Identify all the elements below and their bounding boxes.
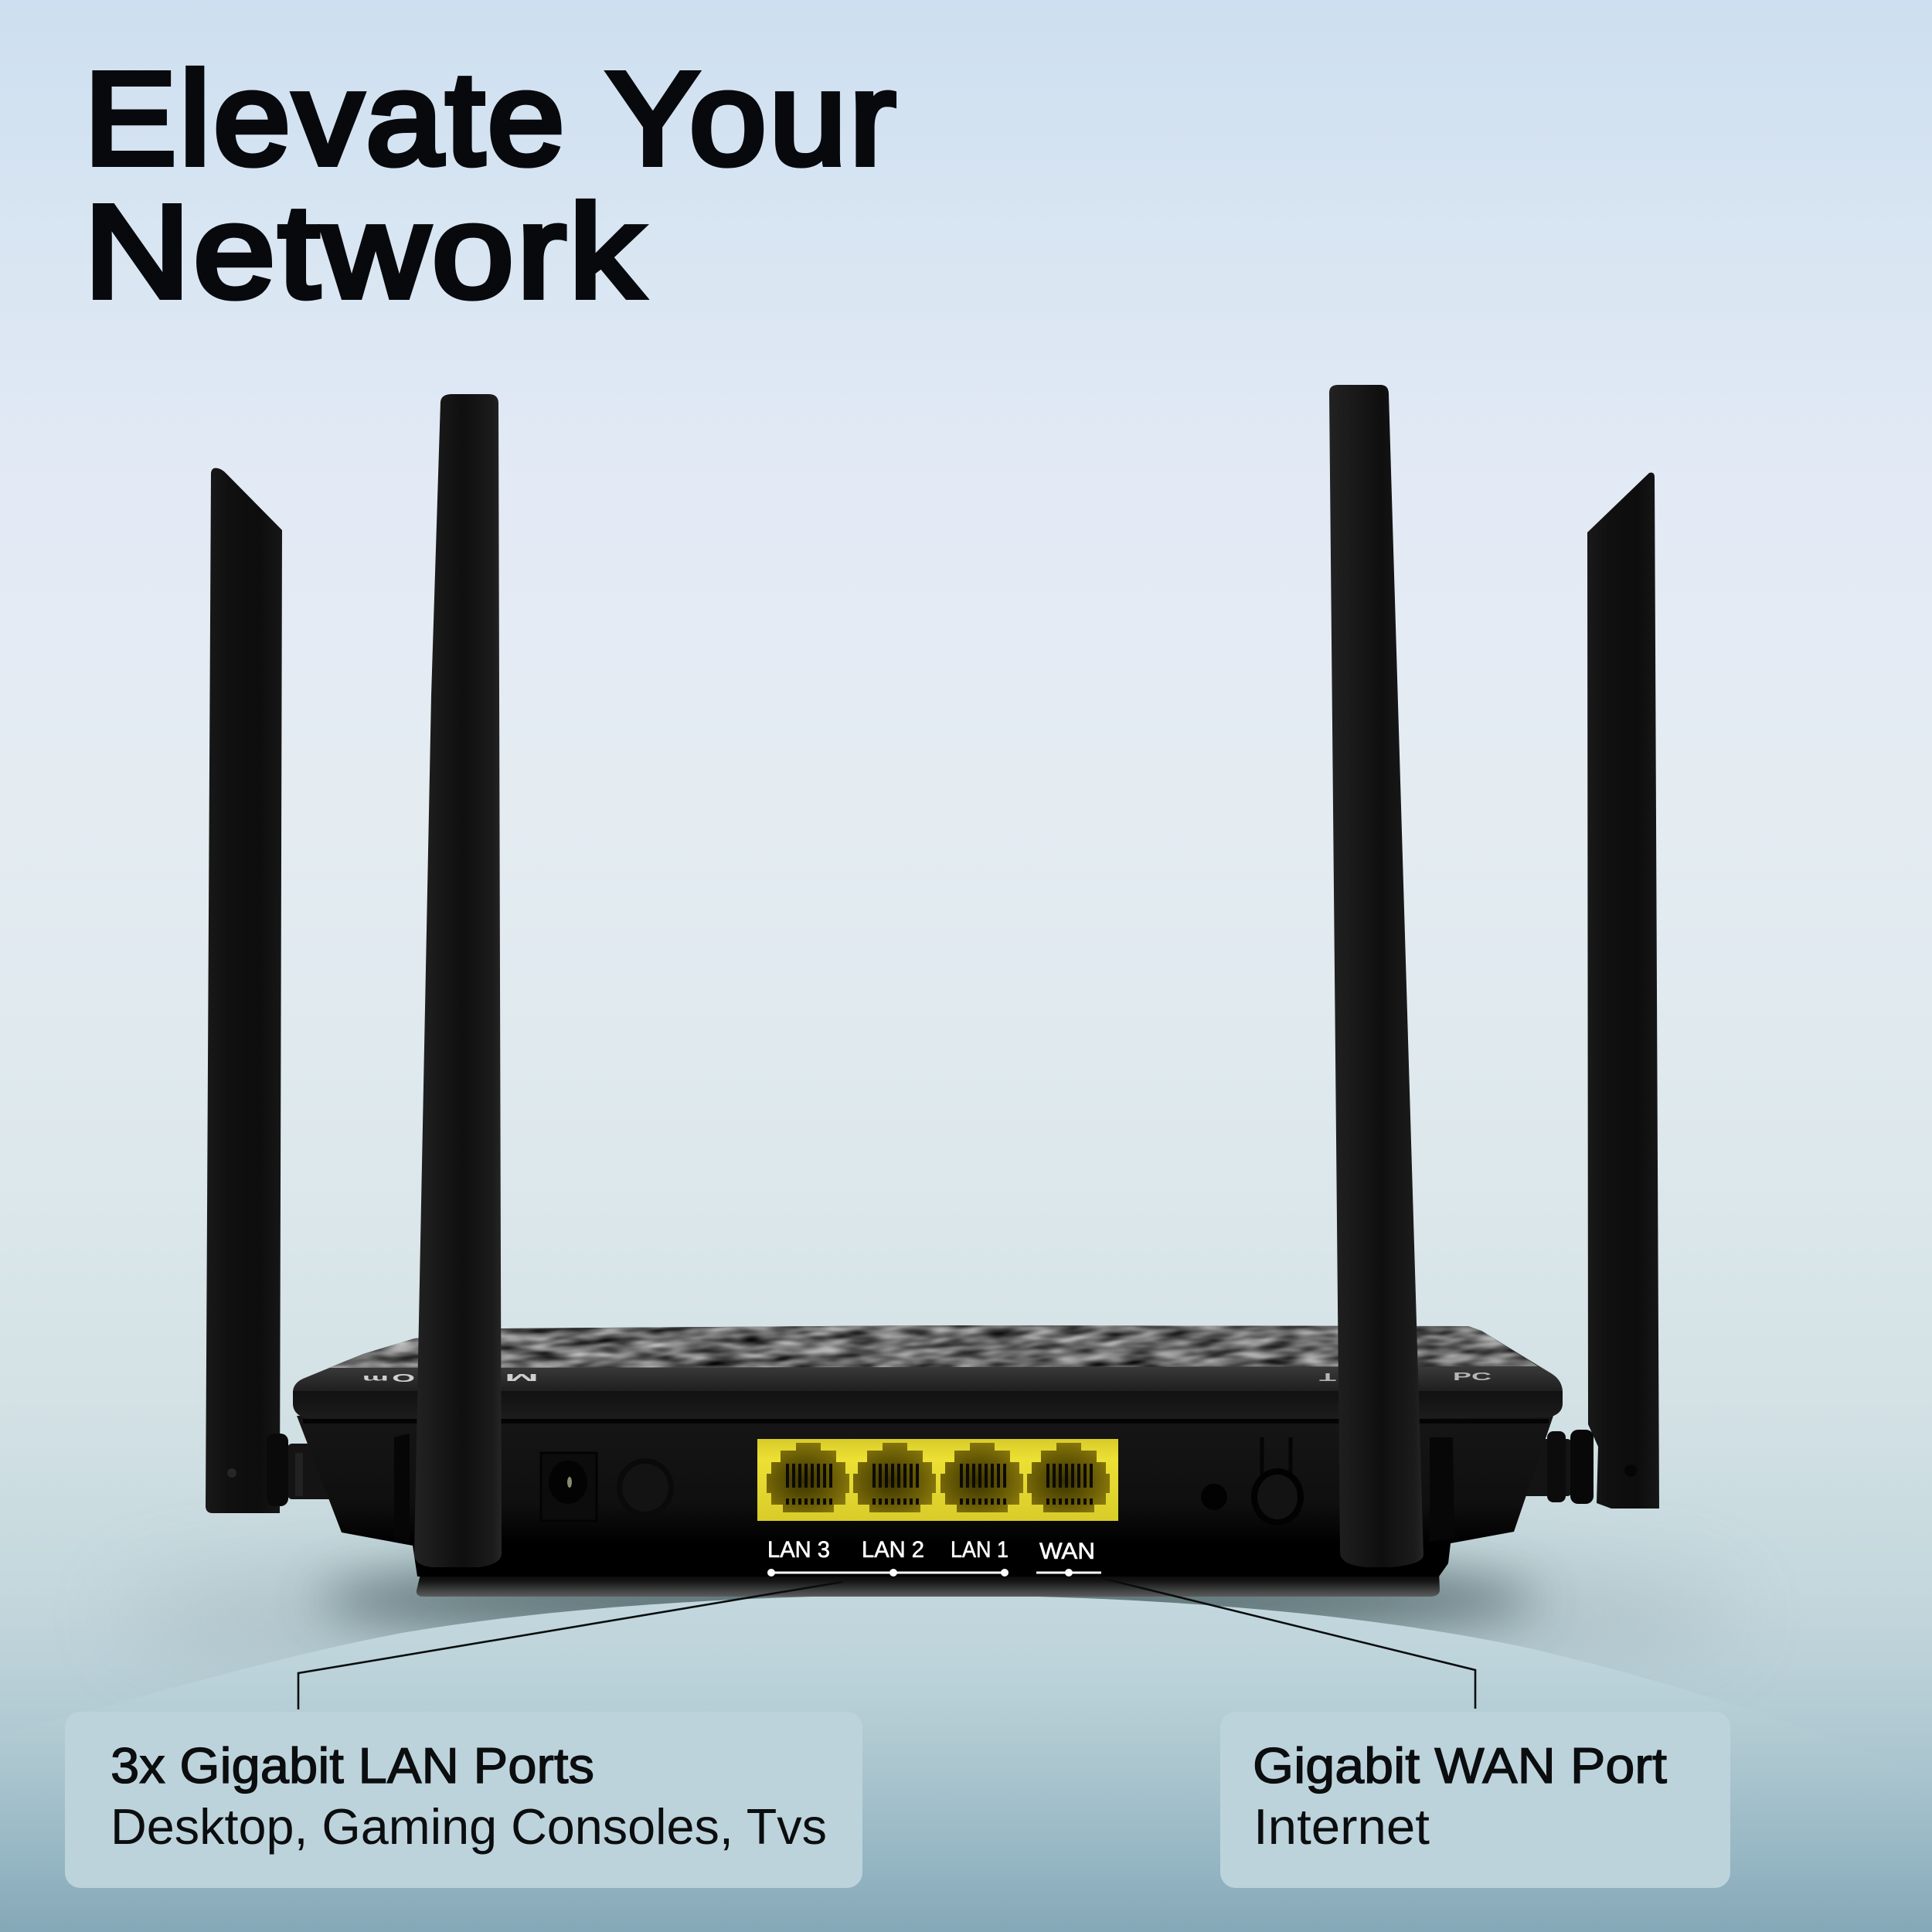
inner-left antenna xyxy=(414,394,502,1567)
yellow port panel xyxy=(757,1439,1118,1521)
reset hole xyxy=(1201,1484,1227,1510)
shadow beneath router xyxy=(317,1560,1538,1640)
lid lettering right: T xyxy=(1319,1371,1336,1383)
lid front edge xyxy=(293,1391,1563,1420)
lid lettering right: PC xyxy=(1453,1370,1492,1383)
far-left antenna xyxy=(206,468,282,1513)
WAN bracket xyxy=(1036,1569,1101,1577)
dimpled vent pattern xyxy=(328,1325,1538,1368)
wide soft shadow beneath router xyxy=(116,1561,1739,1669)
router base plate xyxy=(417,1571,1440,1597)
lid lettering left xyxy=(362,1372,539,1384)
curved floor arc xyxy=(0,1595,1932,1932)
port labels: LAN 2 xyxy=(862,1537,924,1563)
lid lettering left: M xyxy=(505,1372,539,1383)
lid lettering right xyxy=(1319,1370,1492,1383)
body: LAN devices: Desktop, Gaming Consoles, Tvs xyxy=(111,1798,827,1855)
body: WAN use: Internet xyxy=(1253,1798,1430,1855)
title xyxy=(84,46,899,325)
inner-right antenna xyxy=(1329,385,1423,1567)
title: Elevate Your xyxy=(84,46,899,192)
port labels: WAN xyxy=(1039,1539,1095,1564)
port labels xyxy=(767,1537,1095,1564)
port labels: LAN 3 xyxy=(767,1537,830,1563)
leader line: LAN xyxy=(298,1582,842,1709)
title: Network xyxy=(84,179,646,325)
router illustration xyxy=(206,385,1659,1597)
far-right antenna xyxy=(1587,473,1659,1509)
lid lettering left: m xyxy=(362,1373,389,1384)
router top surface xyxy=(293,1325,1563,1393)
router body xyxy=(297,1416,1553,1577)
power jack xyxy=(541,1453,597,1521)
LAN bracket xyxy=(767,1569,1009,1577)
lid seam xyxy=(303,1419,1549,1423)
lid lettering left: O xyxy=(392,1372,415,1383)
right side slot xyxy=(1430,1437,1454,1542)
power button xyxy=(617,1458,674,1517)
leader line: WAN xyxy=(1101,1578,1475,1709)
panel: LAN ports xyxy=(65,1712,862,1888)
port labels: LAN 1 xyxy=(951,1537,1009,1563)
wps button xyxy=(1251,1437,1304,1526)
panel: WAN port xyxy=(1220,1712,1730,1888)
heading: LAN ports: 3x Gigabit LAN Ports xyxy=(111,1737,594,1794)
left antenna connector xyxy=(267,1434,334,1506)
left side slot xyxy=(394,1434,410,1542)
right antenna connector xyxy=(1521,1430,1594,1504)
heading: WAN port: Gigabit WAN Port xyxy=(1253,1737,1667,1794)
